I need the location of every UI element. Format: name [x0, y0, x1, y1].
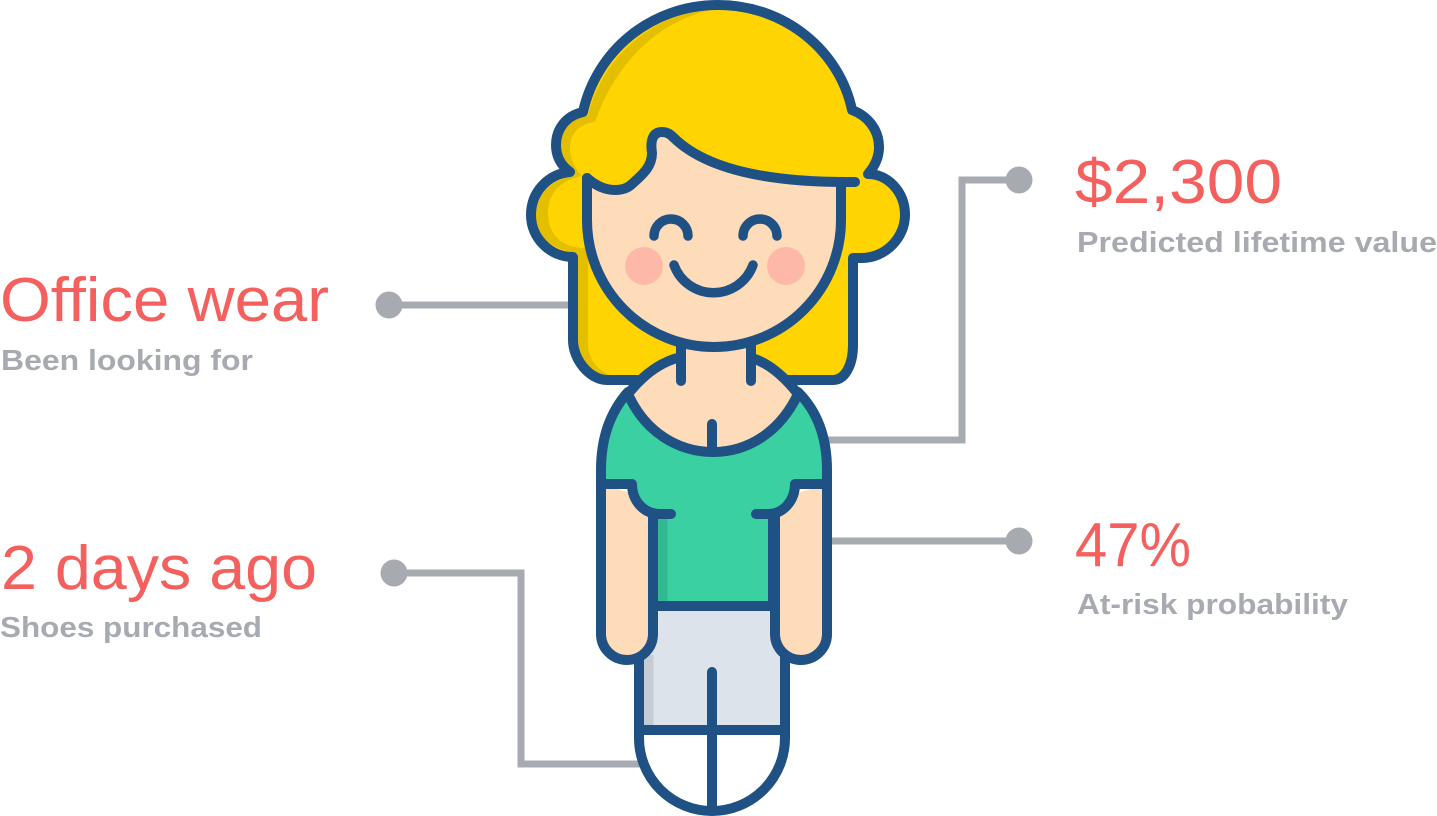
- connector: office wear: [376, 292, 572, 318]
- face: [587, 132, 855, 347]
- shirt: [601, 358, 827, 606]
- connector: shoes purchased: [380, 560, 642, 764]
- text block: shoes purchased: [0, 534, 317, 644]
- text block: shoes purchased: 2 days ago: [1, 534, 317, 603]
- text block: at-risk probability: 47%: [1075, 511, 1191, 580]
- hair back: [531, 5, 905, 380]
- eyes and smile: [654, 219, 777, 293]
- character illustration: [531, 5, 905, 811]
- text block: predicted lifetime value: [1075, 148, 1437, 259]
- text block: at-risk probability: At-risk probability: [1077, 589, 1348, 621]
- arms: [601, 484, 827, 660]
- text block: office wear: Been looking for: [1, 345, 253, 377]
- text block: office wear: Office wear: [0, 266, 329, 335]
- chest and neck: [628, 340, 798, 452]
- text block: predicted lifetime value: $2,300: [1075, 148, 1282, 217]
- text block: office wear: [0, 266, 329, 377]
- text block: predicted lifetime value: Predicted lifetime value: [1077, 227, 1437, 259]
- text block: shoes purchased: Shoes purchased: [0, 612, 262, 644]
- cheeks: [625, 247, 805, 285]
- connector: predicted lifetime value: [826, 166, 1032, 440]
- connector: at-risk probability: [826, 528, 1032, 554]
- text block: at-risk probability: [1075, 511, 1348, 621]
- shorts: [639, 600, 785, 811]
